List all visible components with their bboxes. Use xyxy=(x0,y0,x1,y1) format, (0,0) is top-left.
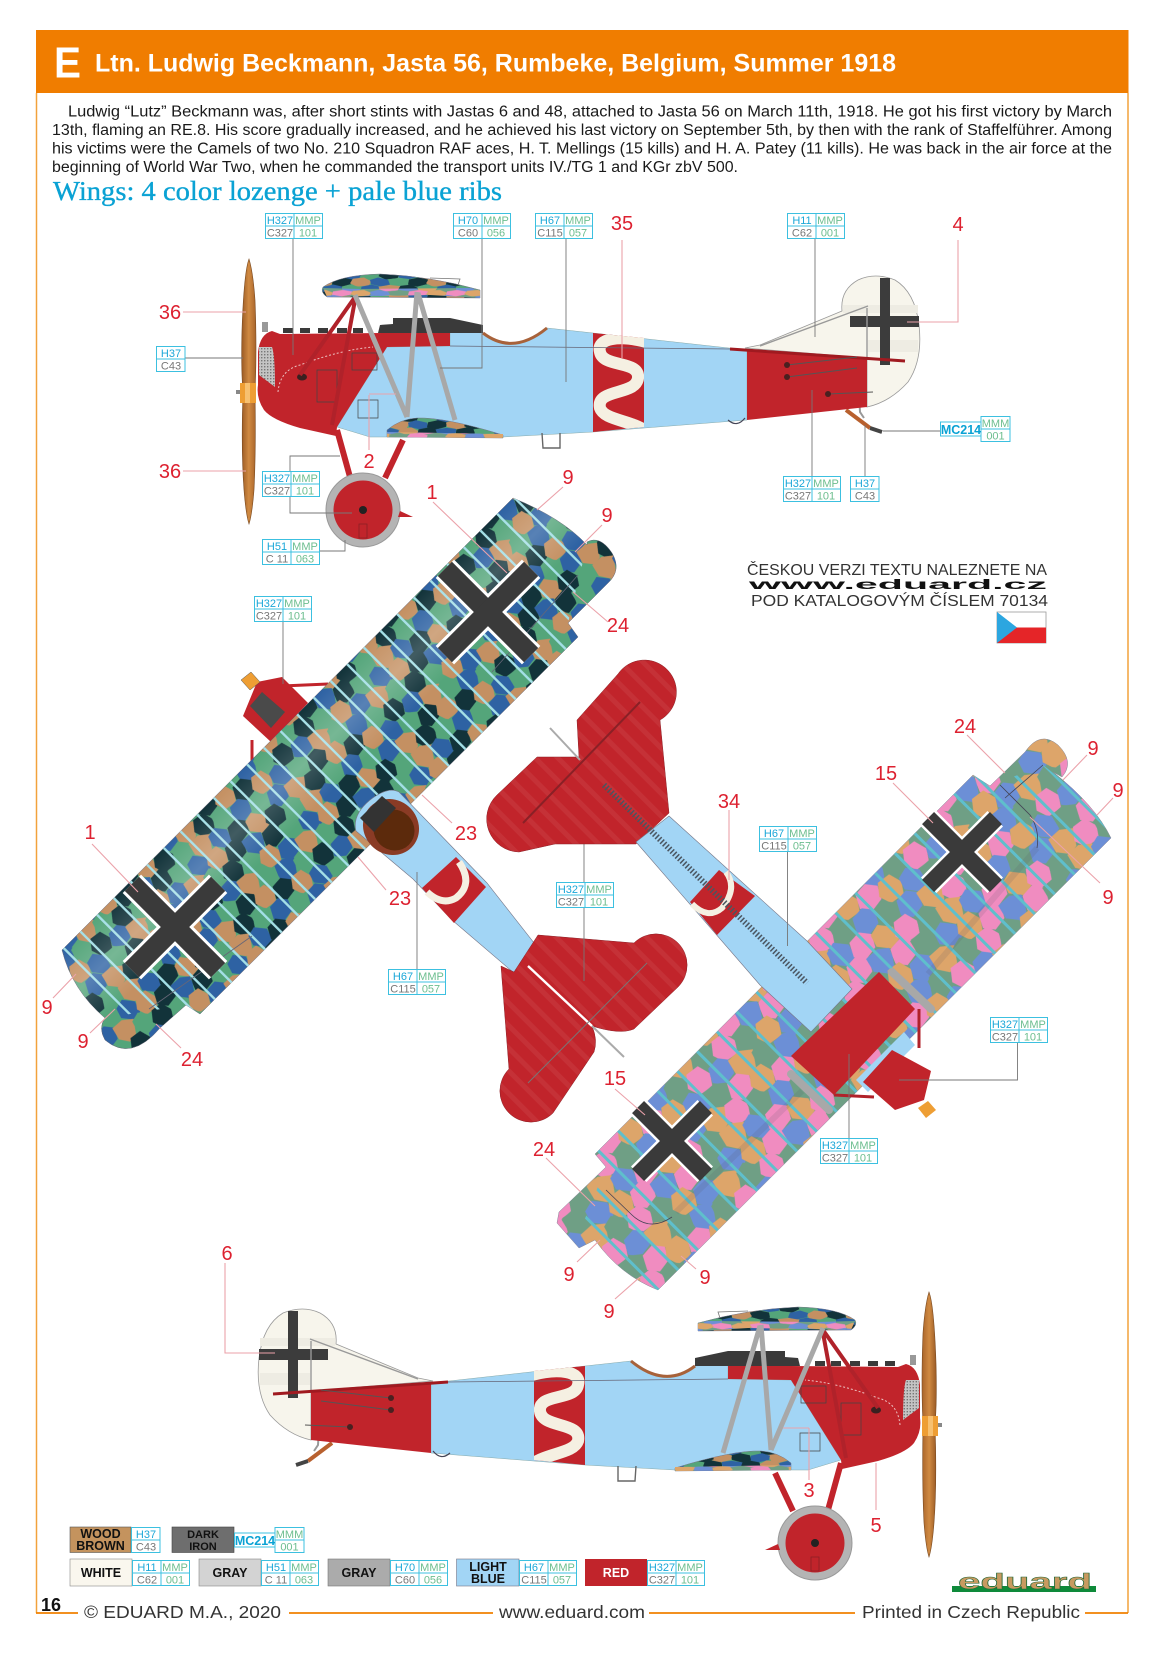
number labels: 1 xyxy=(426,482,438,504)
legend: wood brown: BROWN xyxy=(76,1539,125,1553)
legend: dark iron: IRON xyxy=(189,1541,217,1553)
legend: red xyxy=(585,1559,704,1586)
legend: light blue: C115 xyxy=(521,1574,547,1586)
paint codes: left side profile: 057 xyxy=(569,228,587,240)
paint codes: left side profile: 001 xyxy=(821,228,839,240)
underside view aircraft xyxy=(487,660,1124,1323)
nose underside xyxy=(791,972,936,1118)
paint codes: left side profile: C60 xyxy=(458,228,478,240)
paint codes: underside: MMP xyxy=(1020,1019,1046,1031)
website: www.eduard.com xyxy=(498,1602,645,1622)
callouts: underside: 9 xyxy=(1087,738,1099,760)
czech notice: www.eduard.cz xyxy=(746,576,1047,592)
biography text block xyxy=(52,104,1112,176)
legend: white xyxy=(70,1559,190,1586)
paint codes: top view: 101 xyxy=(288,610,306,622)
paint codes: underside: 101 xyxy=(854,1152,872,1164)
paint codes: underside: C327 xyxy=(822,1152,848,1164)
paint codes: left side profile: C43 xyxy=(161,360,181,372)
legend: wood brown: C43 xyxy=(136,1542,156,1554)
colour legend xyxy=(70,1527,704,1586)
callouts: left side profile: 36 xyxy=(159,461,181,483)
paint codes: top view: MMP xyxy=(418,971,444,983)
paint codes: left side profile: C43 xyxy=(855,490,875,502)
number labels: 35 xyxy=(611,213,633,235)
cross: underside left xyxy=(604,1073,740,1209)
paint codes: underside: MMP xyxy=(850,1140,876,1152)
czech notice: ČESKOU VERZI TEXTU NALEZNETE NA xyxy=(747,562,1048,579)
paint codes: top view: C327 xyxy=(558,896,584,908)
callouts: top view: 24 xyxy=(181,1049,203,1071)
legend: dark iron: MC214 xyxy=(235,1534,275,1548)
eduard logo xyxy=(952,1569,1096,1594)
copyright: © EDUARD M.A., 2020 xyxy=(84,1602,281,1622)
paint codes: left side profile: 056 xyxy=(487,228,505,240)
callouts: underside xyxy=(533,716,1124,1323)
tailplane top view xyxy=(500,934,687,1122)
legend: white: 001 xyxy=(166,1574,184,1586)
paint codes: left side profile: H70 xyxy=(458,215,478,227)
legend: light gray: 063 xyxy=(295,1574,313,1586)
czech notice: POD KATALOGOVÝM ČÍSLEM 70134 xyxy=(751,593,1048,610)
paint codes: top view: 101 xyxy=(590,896,608,908)
engine top view xyxy=(241,672,328,762)
paint codes: underside: MMP xyxy=(789,828,815,840)
legend: white: H11 xyxy=(137,1562,157,1574)
cross: upper wing right xyxy=(402,526,574,698)
callouts: top view: 9 xyxy=(41,997,53,1019)
callouts: underside: 24 xyxy=(954,716,976,738)
footer xyxy=(36,1595,1128,1622)
legend: red: H327 xyxy=(649,1562,675,1574)
callouts: underside: 9 xyxy=(603,1301,615,1323)
paint codes: left side profile: H51 xyxy=(267,541,287,553)
paint codes: top view: MMP xyxy=(586,884,612,896)
callouts: top view: 23 xyxy=(389,888,411,910)
legend: light blue: 057 xyxy=(553,1574,571,1586)
legend: white: WHITE xyxy=(81,1566,121,1580)
legend: medium gray: H70 xyxy=(395,1562,415,1574)
tailplane underside xyxy=(487,660,676,852)
legend: red: C327 xyxy=(649,1574,675,1586)
profile letter: E xyxy=(54,38,81,88)
paint codes: left side profile: 063 xyxy=(296,554,314,566)
legend: light blue: H67 xyxy=(524,1562,544,1574)
paint codes: top view: MMP xyxy=(284,598,310,610)
biography text block: beginning of World War Two, when he commanded the transport units IV./TG 1 and KGr zbV 500. xyxy=(52,159,738,176)
paint codes: left side profile: 101 xyxy=(296,486,314,498)
paint codes: left side profile: MMP xyxy=(292,473,318,485)
legend: light blue: MMP xyxy=(549,1562,575,1574)
legend: wood brown xyxy=(70,1527,160,1554)
paint codes: left side profile: 101 xyxy=(817,490,835,502)
legend: light blue: LIGHT xyxy=(469,1560,507,1574)
legend: medium gray: C60 xyxy=(395,1574,415,1586)
header banner xyxy=(36,30,1128,93)
number labels: 34 xyxy=(718,791,740,813)
right side profile aircraft xyxy=(258,1292,942,1580)
legend: light blue: BLUE xyxy=(471,1572,505,1586)
paint codes: top view: C115 xyxy=(390,984,416,996)
callouts: top view: 1 xyxy=(84,822,96,844)
page number: 16 xyxy=(41,1595,61,1615)
callouts: top view: 24 xyxy=(607,615,629,637)
legend: red: RED xyxy=(603,1566,629,1580)
legend: light gray: C 11 xyxy=(265,1574,287,1586)
legend: wood brown: WOOD xyxy=(80,1527,121,1541)
callouts: right side profile: 3 xyxy=(803,1480,815,1502)
legend: dark iron: 001 xyxy=(280,1542,299,1554)
paint codes: underside: H67 xyxy=(764,828,784,840)
legend: white: C62 xyxy=(137,1574,157,1586)
czech notice xyxy=(746,562,1048,643)
paint codes: left side profile: H37 xyxy=(855,478,875,490)
biography text block: Ludwig “Lutz” Beckmann was, after short stints with Jastas 6 and 48, attached to Jasta 56 on March 11th, 1918. He got his first victory by March xyxy=(68,104,1112,120)
biography text block: 13th, flaming an RE.8. His score gradually increased, and he achieved his last victory on September 5th, by then with the rank of Staffelführer. Among xyxy=(52,122,1112,139)
paint codes: left side profile: C62 xyxy=(792,228,812,240)
callouts: right side profile xyxy=(221,1243,882,1537)
printed in: Printed in Czech Republic xyxy=(862,1602,1080,1622)
legend: medium gray: GRAY xyxy=(342,1566,377,1580)
legend: red: 101 xyxy=(681,1574,699,1586)
callouts: top view: 9 xyxy=(77,1031,89,1053)
left side profile aircraft xyxy=(236,259,920,547)
paint codes: underside: C327 xyxy=(992,1032,1018,1044)
paint codes: left side profile: H327 xyxy=(264,473,290,485)
upper wing xyxy=(62,498,616,1049)
callouts: underside: 15 xyxy=(875,763,897,785)
callouts: underside: 9 xyxy=(1112,780,1124,802)
paint codes: left side profile: H11 xyxy=(792,215,812,227)
legend: dark iron: DARK xyxy=(187,1529,219,1541)
paint codes: left side profile: H37 xyxy=(161,348,181,360)
callouts: right side profile: 6 xyxy=(221,1243,233,1265)
paint codes: left side profile: MC214 xyxy=(941,423,981,437)
paint codes: top view: H67 xyxy=(393,971,413,983)
paint codes: left side profile: MMP xyxy=(295,215,321,227)
legend: white: MMP xyxy=(162,1562,188,1574)
paint codes: top view xyxy=(254,596,614,996)
callouts: left side profile xyxy=(159,213,964,551)
paint codes: left side profile: C115 xyxy=(537,228,563,240)
icon: czech flag xyxy=(997,612,1046,643)
cross: underside right xyxy=(894,784,1030,920)
legend: red: MMP xyxy=(677,1562,703,1574)
paint codes: top view: 057 xyxy=(422,984,440,996)
fuselage underside xyxy=(604,785,852,1032)
top view aircraft xyxy=(41,467,687,1122)
callouts: left side profile: 36 xyxy=(159,302,181,324)
paint codes: left side profile: MMP xyxy=(817,215,843,227)
callouts: underside: 24 xyxy=(533,1139,555,1161)
callouts: left side profile: 2 xyxy=(363,451,375,473)
paint codes: left side profile: C327 xyxy=(785,490,811,502)
callouts: top view xyxy=(41,467,629,1071)
paint codes: left side profile: H67 xyxy=(540,215,560,227)
paint codes: left side profile: C 11 xyxy=(266,554,288,566)
paint codes: left side profile: C327 xyxy=(264,486,290,498)
callouts: underside: 9 xyxy=(699,1267,711,1289)
paint codes: left side profile: C327 xyxy=(267,228,293,240)
cross: upper wing left xyxy=(89,841,261,1013)
paint codes: left side profile xyxy=(156,214,1010,566)
paint codes: left side profile: 101 xyxy=(299,228,317,240)
biography text block: his victims were the Camels of two No. 210 Squadron RAF aces, H. T. Mellings (15 kills) and H. A. Patey (11 kills). He was back in the air force at the xyxy=(52,140,1112,158)
callouts: top view: 9 xyxy=(601,505,613,527)
subheading: wings: Wings: 4 color lozenge + pale blue ribs xyxy=(53,176,502,206)
legend: dark iron: MMM xyxy=(276,1529,303,1541)
lower wing underside xyxy=(557,739,1111,1290)
legend: medium gray xyxy=(328,1559,448,1586)
paint codes: left side profile: MMM xyxy=(982,418,1009,430)
paint codes: underside: H327 xyxy=(992,1019,1018,1031)
paint codes: underside: C115 xyxy=(761,840,787,852)
fuselage top view xyxy=(351,787,538,973)
callouts: top view: 9 xyxy=(562,467,574,489)
legend: medium gray: 056 xyxy=(424,1574,442,1586)
legend: light gray: MMP xyxy=(291,1562,317,1574)
callouts: underside: 9 xyxy=(563,1264,575,1286)
callouts: left side profile: 4 xyxy=(952,214,964,236)
legend: light gray xyxy=(199,1559,318,1586)
legend: dark iron xyxy=(172,1527,304,1554)
callouts: underside: 9 xyxy=(1102,887,1114,909)
paint codes: left side profile: 001 xyxy=(986,430,1005,442)
callouts: top view: 23 xyxy=(455,823,477,845)
paint codes: underside xyxy=(760,826,1048,1164)
legend: wood brown: H37 xyxy=(136,1529,156,1541)
paint codes: left side profile: MMP xyxy=(565,215,591,227)
eduard logo: eduard xyxy=(958,1569,1092,1594)
legend: medium gray: MMP xyxy=(420,1562,446,1574)
paint codes: left side profile: H327 xyxy=(267,215,293,227)
paint codes: left side profile: MMP xyxy=(292,541,318,553)
callouts: underside: 15 xyxy=(604,1068,626,1090)
legend: light blue xyxy=(456,1559,576,1586)
paint codes: underside: H327 xyxy=(822,1140,848,1152)
paint codes: underside: 101 xyxy=(1024,1032,1042,1044)
paint codes: left side profile: MMP xyxy=(813,478,839,490)
paint codes: top view: H327 xyxy=(558,884,584,896)
paint codes: left side profile: MMP xyxy=(483,215,509,227)
paint codes: underside: 057 xyxy=(793,840,811,852)
legend: light gray: H51 xyxy=(266,1562,286,1574)
title: Ltn. Ludwig Beckmann, Jasta 56, Rumbeke, Belgium, Summer 1918 xyxy=(95,50,896,78)
paint codes: left side profile: H327 xyxy=(785,478,811,490)
paint codes: top view: H327 xyxy=(256,598,282,610)
callouts: right side profile: 5 xyxy=(870,1515,882,1537)
paint codes: top view: C327 xyxy=(256,610,282,622)
legend: light gray: GRAY xyxy=(213,1566,248,1580)
